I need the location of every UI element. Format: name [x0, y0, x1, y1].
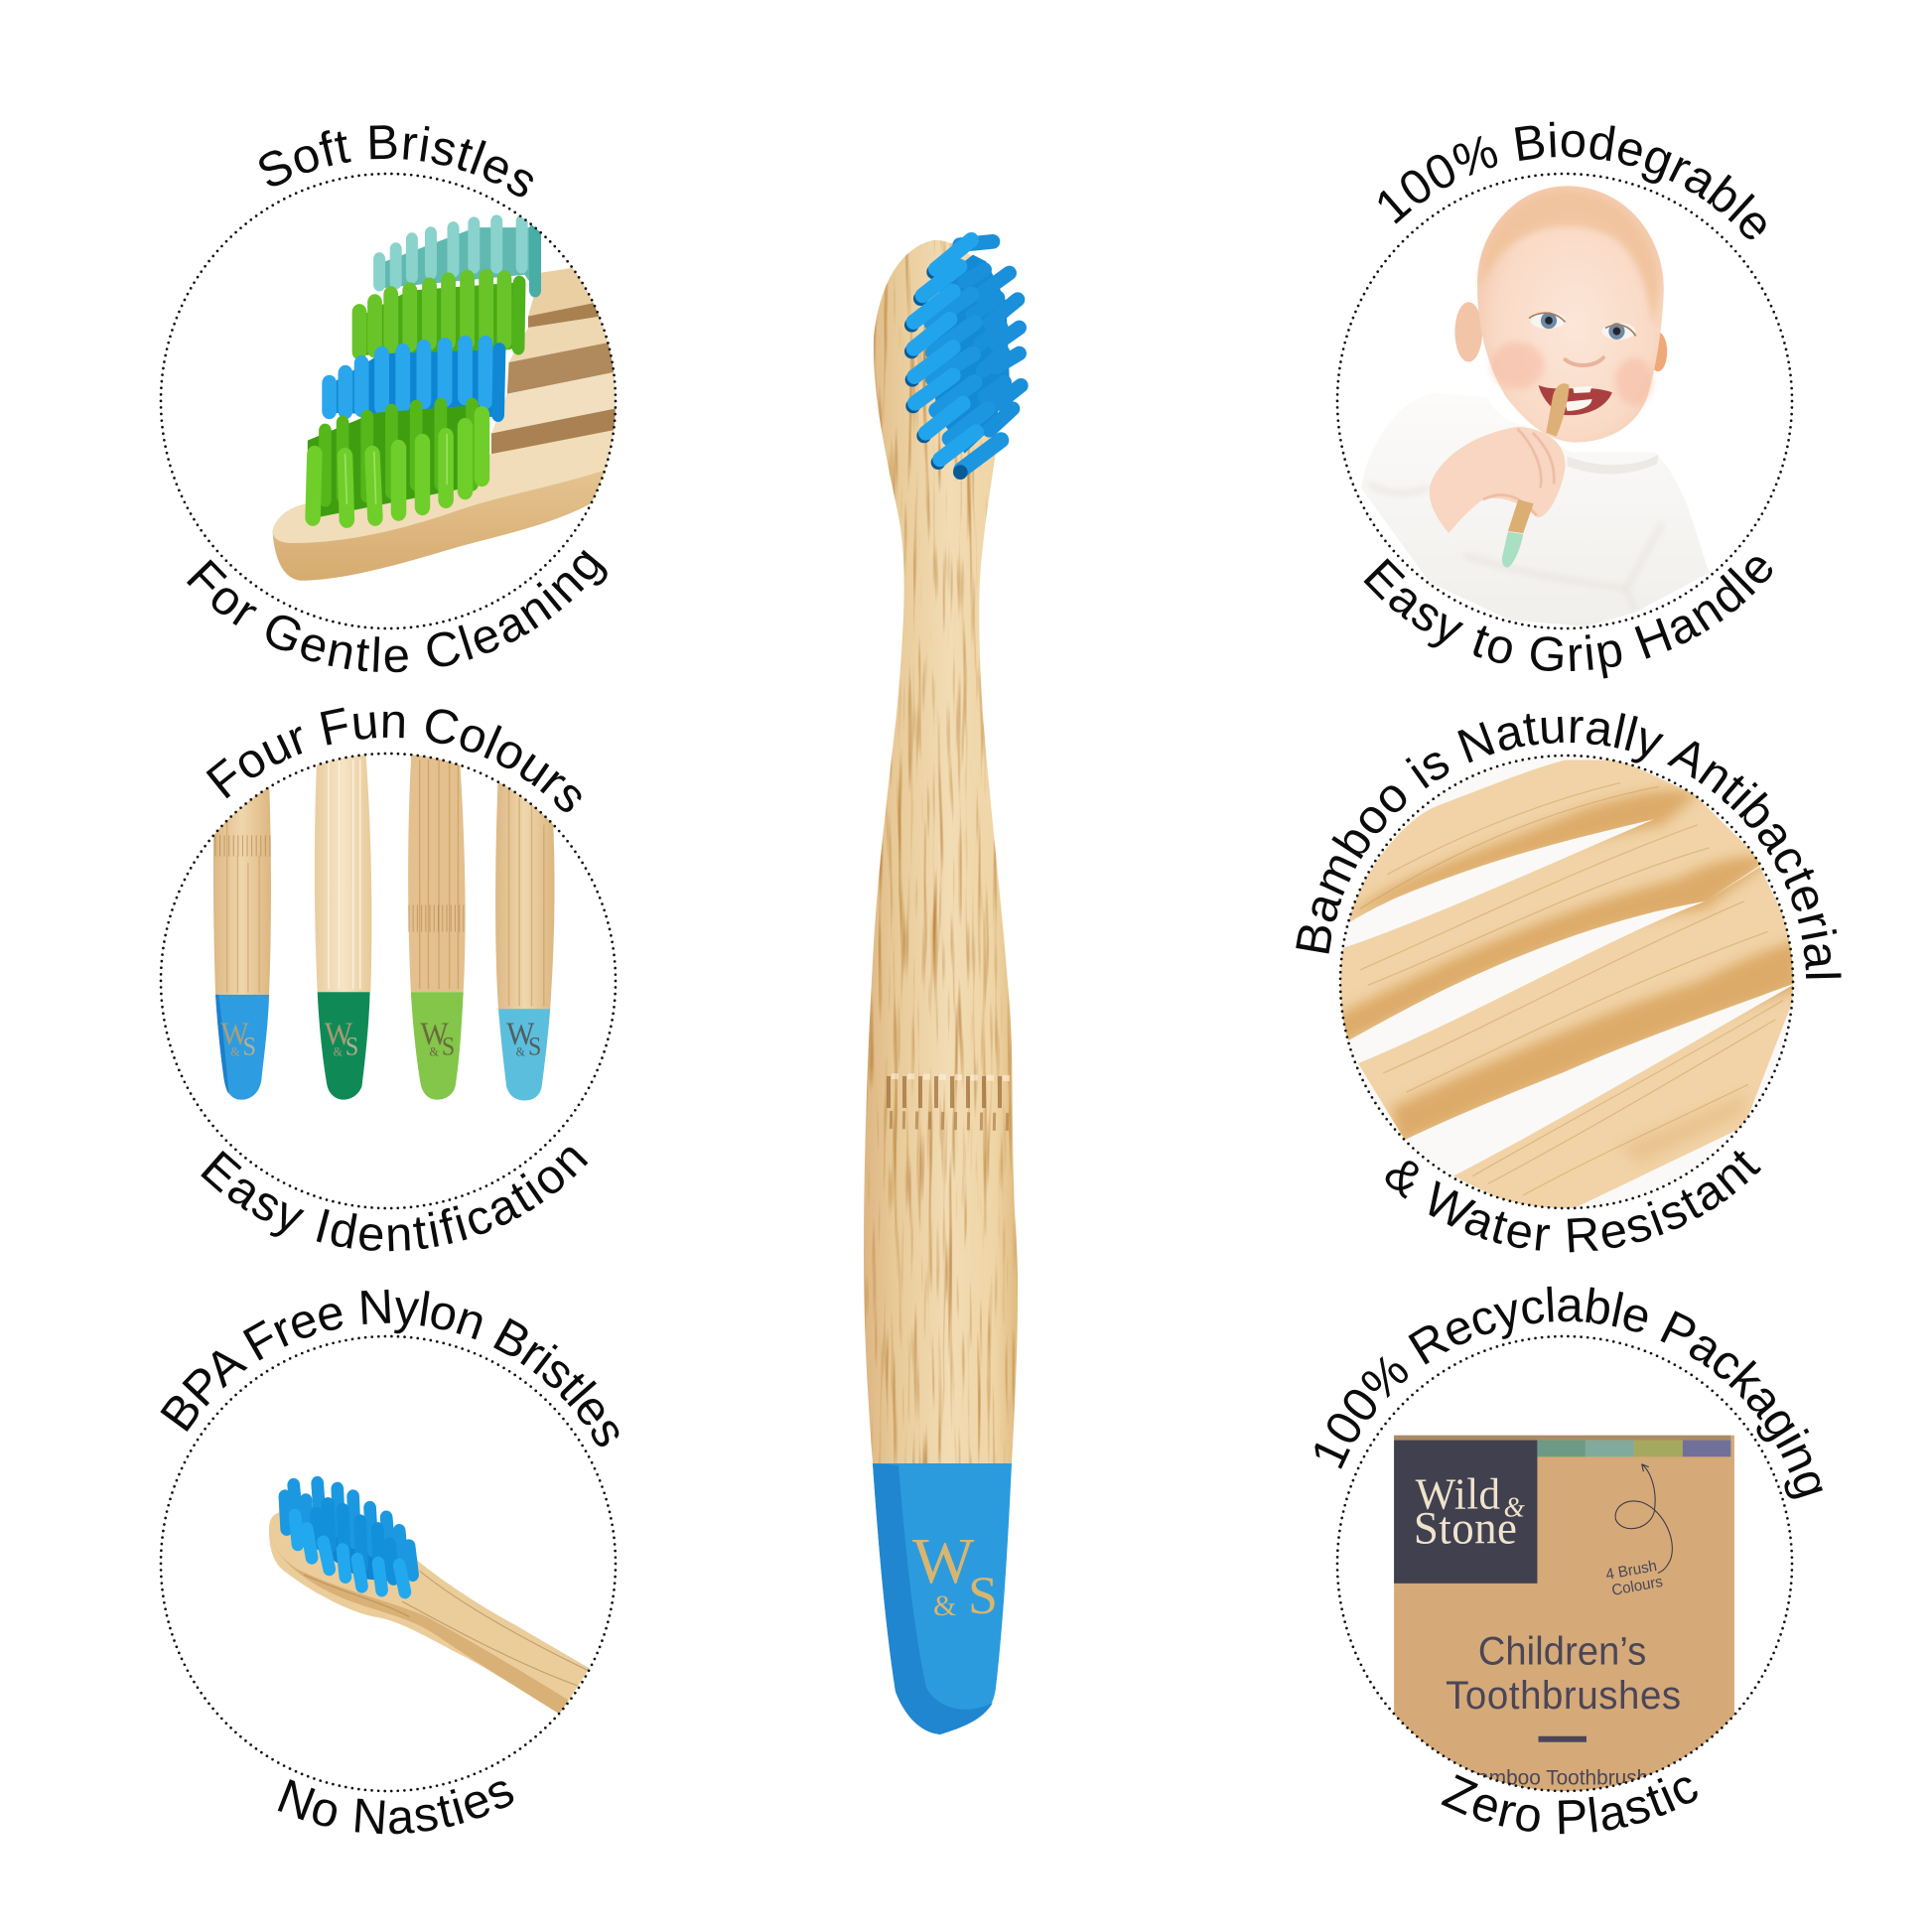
- curved caption: Easy to Grip Handle: Easy to Grip Handle: [1364, 557, 1772, 679]
- white shirt: [1361, 393, 1710, 626]
- product title line two: Toothbrushes: [1446, 1675, 1681, 1718]
- cheeks: [1491, 342, 1544, 389]
- handle: dark green: [315, 733, 371, 1100]
- mint tip: [1502, 532, 1523, 568]
- dotted ring: [1340, 756, 1793, 1208]
- brand block: [1394, 1441, 1537, 1584]
- curved heading: Bamboo is Naturally Antibacterial: Bamboo is Naturally Antibacterial: [1296, 713, 1842, 979]
- mouth: [1539, 385, 1612, 415]
- looping arrow: [1615, 1464, 1672, 1573]
- tip side facet: [873, 1463, 993, 1734]
- ears: [1454, 302, 1482, 362]
- photo: angled brush head with blue bristles: [269, 1483, 590, 1715]
- logo letter S: S: [968, 1566, 998, 1625]
- panel: biodegradable, easy grip: [1336, 121, 1793, 679]
- curved caption: & Water Resistant: & Water Resistant: [1386, 1150, 1761, 1253]
- dotted ring: [161, 174, 616, 628]
- brand block: &: [1504, 1492, 1525, 1524]
- label: 4 Brush Colours: [1606, 1561, 1662, 1594]
- toothbrush handle: [1508, 499, 1534, 533]
- label: 4 Brush Colours: Colours: [1610, 1574, 1664, 1599]
- cut-off product line: Bamboo Toothbrushes: [1463, 1766, 1670, 1790]
- darker bands: [1336, 790, 1803, 1165]
- label: 4 Brush Colours: 4 Brush: [1604, 1558, 1658, 1584]
- curved caption: For Gentle Cleaning: For Gentle Cleaning: [187, 550, 608, 673]
- dotted ring: [1337, 1336, 1792, 1791]
- handle: blue: &: [230, 1044, 240, 1059]
- handle: dark green: &: [334, 1044, 343, 1059]
- curved heading: Soft Bristles: Soft Bristles: [259, 125, 533, 197]
- handle: blue: W: [220, 1016, 249, 1051]
- product title: Children’s: [1478, 1630, 1646, 1674]
- photo: four colour-dipped handles: [213, 733, 555, 1100]
- photo: kraft cardboard box: [1394, 1436, 1734, 1805]
- head: [1477, 186, 1664, 443]
- panel: soft bristles: [159, 125, 618, 673]
- handle: dark green: S: [345, 1034, 358, 1061]
- toothbrush in mouth: [1546, 383, 1569, 437]
- handle: aqua: &: [516, 1044, 525, 1059]
- brand block: Wild: [1416, 1470, 1500, 1519]
- handle: aqua: S: [528, 1034, 541, 1061]
- teal bristle row: [376, 221, 539, 295]
- bristles: [904, 240, 1021, 480]
- bristle mass: [930, 255, 1010, 454]
- hair: [1481, 190, 1659, 326]
- handle: aqua: W: [506, 1016, 535, 1051]
- curved heading: BPA Free Nylon Bristles: BPA Free Nylon Bristles: [160, 1289, 620, 1447]
- brand block: Stone: [1414, 1502, 1517, 1554]
- curved heading: 100% Recyclable Packaging: 100% Recyclable Packaging: [1314, 1287, 1823, 1499]
- curved caption: Zero Plastic: Zero Plastic: [1442, 1774, 1698, 1835]
- dotted ring: [161, 1336, 616, 1791]
- handle: blue: S: [243, 1034, 256, 1061]
- dotted ring: [161, 754, 616, 1208]
- photo: smiling baby holding a toothbrush: [1361, 186, 1710, 626]
- dotted ring: [1337, 174, 1792, 628]
- curved caption: Easy Identification: Easy Identification: [201, 1148, 588, 1251]
- handle: lime green: [408, 733, 466, 1100]
- panel: no nasties: [159, 1289, 620, 1835]
- curved caption: No Nasties: No Nasties: [278, 1779, 514, 1835]
- panel: four fun colours: [159, 707, 618, 1251]
- panel: antibacterial bamboo: [1296, 713, 1842, 1253]
- wood grain: [864, 240, 1018, 1463]
- curved heading: 100% Biodegrable: 100% Biodegrable: [1378, 121, 1766, 239]
- bamboo strips: [1340, 760, 1793, 1208]
- nose: [1566, 357, 1603, 365]
- logo: W and S: W: [912, 1525, 975, 1597]
- green bristle row, back: [353, 277, 521, 355]
- logo ampersand: &: [933, 1589, 956, 1622]
- bristles: front row: [295, 1516, 405, 1591]
- curved heading: Four Fun Colours: Four Fun Colours: [207, 707, 582, 812]
- central toothbrush: [864, 240, 1021, 1734]
- handle: blue: [212, 786, 271, 1100]
- photo: bamboo handle close-up: [1340, 759, 1793, 1208]
- fine grain: [1360, 782, 1783, 1195]
- blue dipped tip: [873, 1463, 1012, 1734]
- handle: dark green: W: [325, 1016, 352, 1051]
- bamboo node: [887, 1076, 1013, 1122]
- green bristle row, front: [308, 405, 486, 519]
- photo: four brush heads with green, blue and teal bristles: [273, 221, 618, 581]
- colour strip: [1537, 1441, 1730, 1456]
- bristles: back rows: [285, 1483, 413, 1575]
- panel: recyclable packaging: [1314, 1287, 1823, 1835]
- handle: aqua: [495, 733, 555, 1100]
- bristle mass: [317, 1537, 387, 1581]
- handle: lime green: &: [430, 1044, 439, 1059]
- handle: [864, 240, 1018, 1463]
- blue bristle row: [329, 344, 500, 417]
- shirt folds: [1368, 483, 1663, 611]
- hand: [1430, 427, 1566, 533]
- handle: lime green: S: [442, 1034, 455, 1061]
- handle: lime green: W: [420, 1016, 449, 1051]
- eyes: [1529, 313, 1636, 340]
